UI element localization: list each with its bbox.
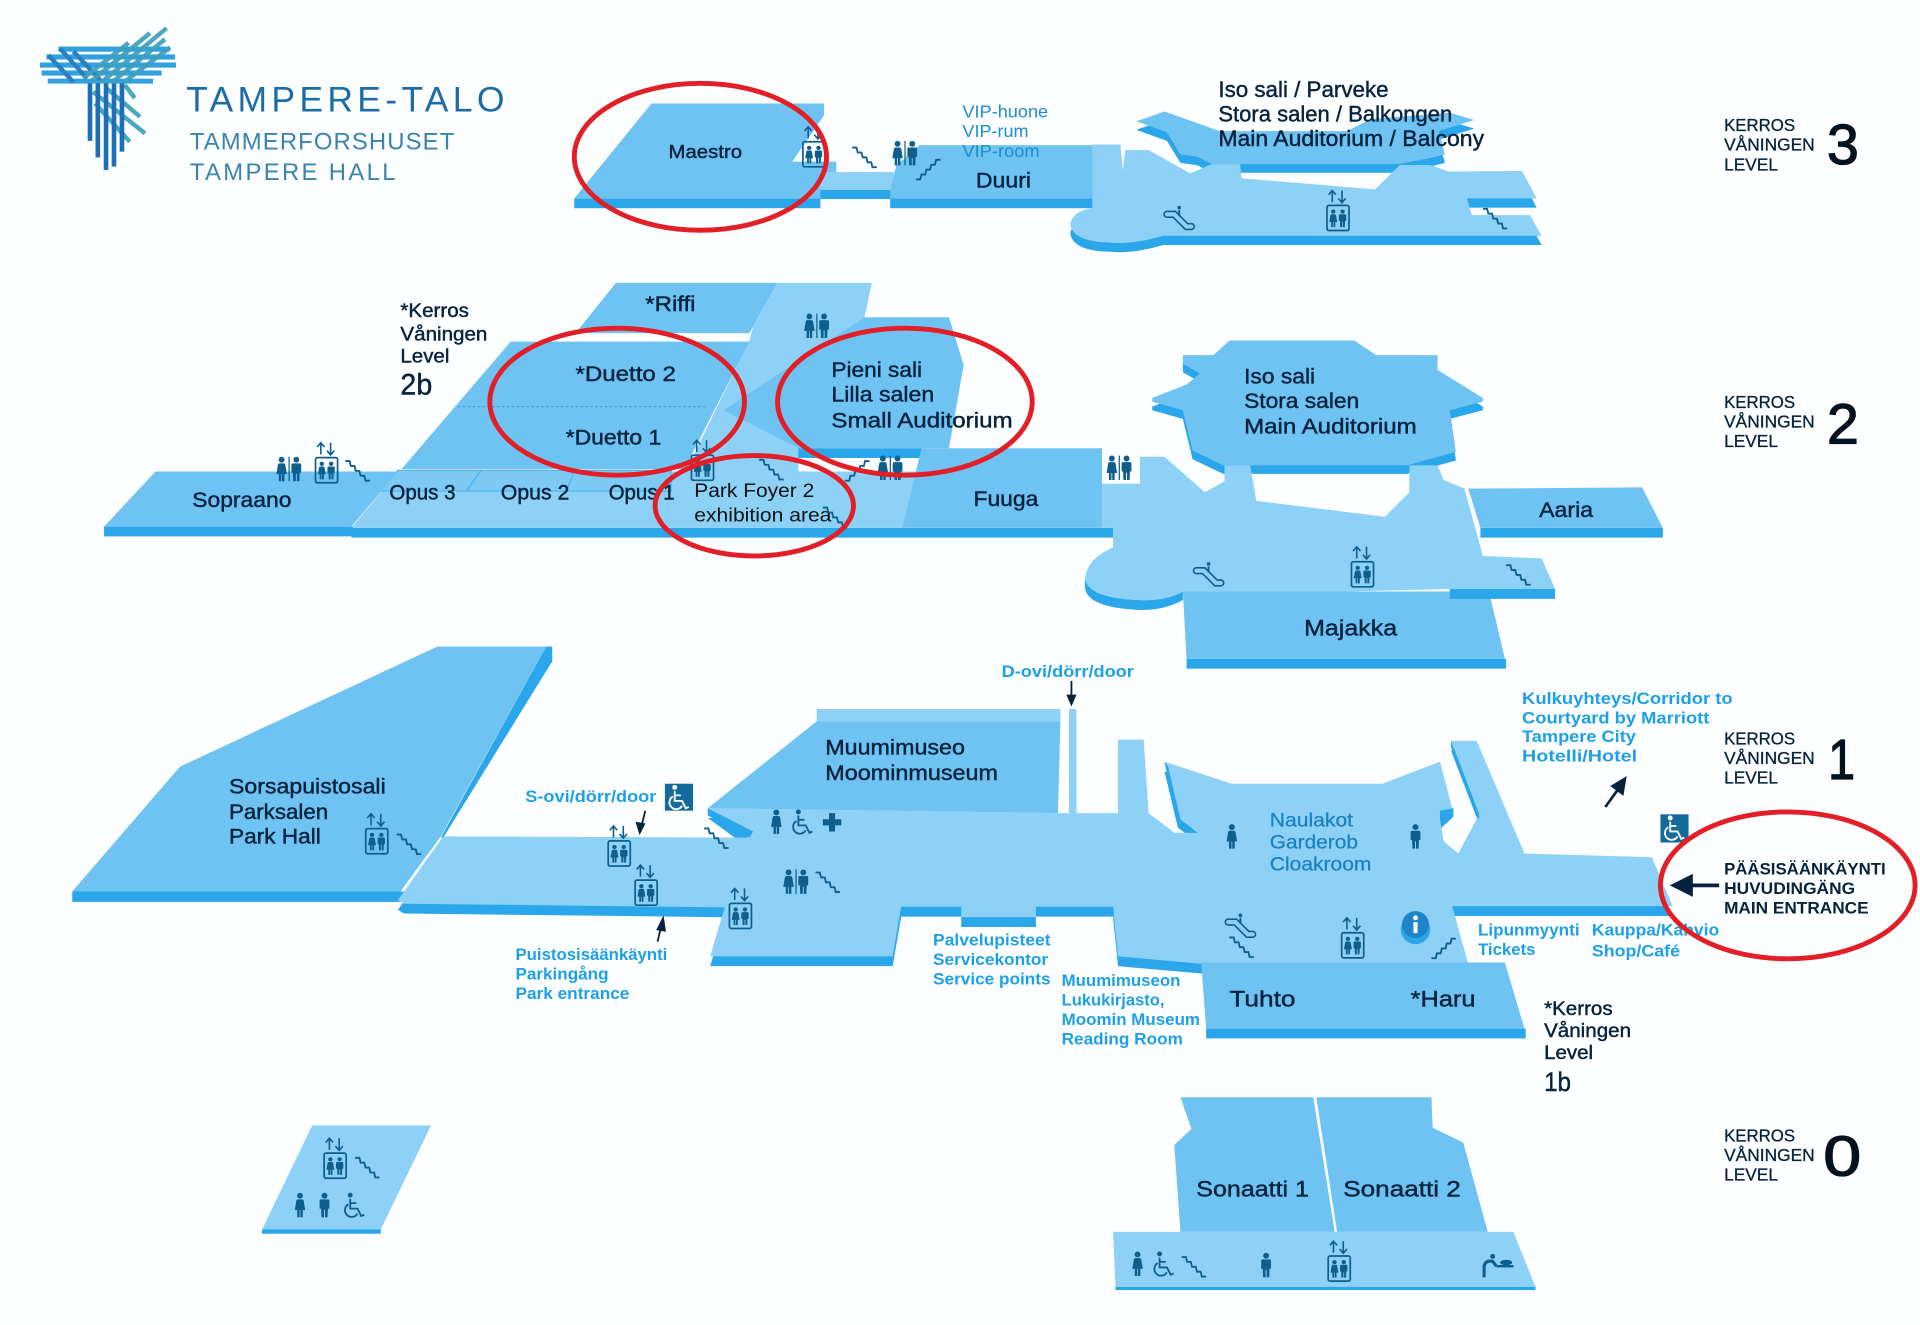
level 2 label: LEVEL [1724, 431, 1778, 451]
icon: stairs level 0 [1182, 1257, 1206, 1277]
tickets label: Lipunmyynti [1478, 921, 1580, 940]
icon: toilets Fuuga [1107, 456, 1131, 480]
Opus labels: Opus 2 [501, 482, 569, 505]
Pieni sali hall: Lilla salen [831, 384, 934, 407]
level 1b label: Våningen [1544, 1021, 1631, 1042]
service points label: Servicekontor [933, 950, 1049, 969]
icon: lift small block [324, 1138, 346, 1178]
VIP room label: VIP-room [962, 141, 1040, 161]
Pieni sali hall [724, 317, 1013, 471]
icon: toilets level 3 [892, 141, 917, 165]
icon: lift corridor [635, 865, 657, 905]
balcony label: Stora salen / Balkongen [1218, 101, 1452, 126]
connecting corridor level 3 [820, 172, 894, 199]
icon: man level 0 [1261, 1253, 1271, 1277]
icon: lift Maestro [803, 127, 825, 167]
icon: first aid [823, 813, 841, 831]
Park Hall [72, 647, 552, 902]
Sonaatti 1 hall: Sonaatti 1 [1196, 1176, 1309, 1201]
Park Foyer label [694, 481, 832, 527]
Sopraano hall: Sopraano [192, 489, 291, 512]
icon: woman small block [295, 1193, 305, 1217]
level 2b label: Våningen [400, 324, 487, 345]
icon: lift Park Hall [366, 814, 388, 854]
floor plan: level 1 [72, 647, 1886, 1049]
red highlight ellipses [490, 83, 1915, 959]
icon: stairs Park Hall [397, 835, 421, 854]
Opus labels: Opus 1 [609, 482, 675, 505]
main entrance label [1724, 859, 1886, 918]
service points label: Service points [933, 970, 1051, 989]
balcony label: Iso sali / Parveke [1218, 77, 1389, 102]
icon: stairs up foyer [845, 461, 869, 481]
Duetto halls: *Duetto 1 [566, 427, 661, 450]
icon: stairs up level 1 [1431, 939, 1456, 958]
level 0 label: LEVEL [1724, 1164, 1778, 1184]
main entrance label: HUVUDINGÄNG [1724, 879, 1855, 898]
logo: Tampere-Talo [40, 28, 504, 186]
cloakroom label: Naulakot [1270, 811, 1354, 832]
Moomin Museum: Moominmuseum [825, 762, 998, 785]
cloakroom label: Cloakroom [1270, 855, 1371, 876]
level 3 label [1724, 113, 1859, 176]
arrow: S door [637, 811, 645, 833]
icon: stairs level 2 right [1506, 565, 1531, 585]
icon: lift level 0 [1328, 1241, 1350, 1281]
Fuuga hall: Fuuga [973, 488, 1039, 511]
level 3 label: LEVEL [1724, 154, 1778, 174]
Iso sali hall: Stora salen [1244, 390, 1359, 413]
Pieni sali hall: Pieni sali [831, 359, 922, 382]
Moomin Museum [708, 709, 1060, 838]
reading room label: Moomin Museum [1062, 1010, 1200, 1029]
Pieni sali hall: Small Auditorium [831, 409, 1013, 432]
arrow: main entrance [1674, 877, 1719, 894]
main entrance label: MAIN ENTRANCE [1724, 899, 1869, 918]
Duuri hall [890, 145, 1098, 208]
Park Foyer label: Park Foyer 2 [694, 481, 814, 502]
Park entrance label: Park entrance [516, 984, 629, 1003]
icon: escalator level 1 [1228, 914, 1253, 934]
logo text: Tampere-Talo: TAMPERE-TALO [186, 79, 504, 119]
level 0 label: KERROS [1724, 1125, 1795, 1145]
icon: information [1401, 911, 1430, 944]
floor plan: level 3 [574, 77, 1542, 252]
icon: woman cloakroom [1227, 824, 1237, 849]
Riffi hall: *Riffi [645, 293, 696, 316]
icon: woman Moomin [771, 809, 782, 834]
level 1 label: 1 [1828, 728, 1855, 791]
service points label [933, 930, 1051, 989]
shop and cafe label: Shop/Café [1592, 941, 1680, 960]
cloakroom label: Garderob [1270, 833, 1358, 854]
logo text: Tammerforshuset: TAMMERFORSHUSET [190, 128, 455, 155]
Duetto halls [402, 342, 749, 469]
level 1b label: Level [1544, 1043, 1593, 1064]
Aaria hall [1468, 487, 1663, 538]
Majakka hall: Majakka [1304, 616, 1398, 641]
corridor to hotel label: Hotelli/Hotel [1522, 747, 1637, 766]
corridor to hotel label [1522, 689, 1733, 766]
arrow: corridor to hotel [1605, 779, 1625, 807]
level 2b label: 2b [400, 368, 432, 401]
icon: wheelchair badge S door [665, 784, 693, 811]
level 3 label: VÅNINGEN [1724, 135, 1815, 155]
level 2 label [1724, 392, 1859, 455]
level 0 label: 0 [1823, 1125, 1861, 1188]
Tuhto and Haru halls [1201, 962, 1526, 1038]
Sonaatti 1 hall [1174, 1097, 1335, 1232]
cloakroom label [1270, 811, 1371, 876]
icon: lift Sopraano [316, 443, 338, 483]
tickets label: Tickets [1478, 940, 1536, 959]
icon: lift level 3 lobby [1327, 190, 1349, 230]
icon: lift lower corridor [729, 888, 751, 928]
icon: stairs foyer [759, 460, 784, 479]
highlight: Park Foyer [655, 456, 853, 556]
icon: toilets Riffi [804, 314, 829, 338]
logo mark: woven T [40, 28, 176, 170]
Iso sali hall: Main Auditorium [1244, 416, 1417, 439]
foyer strip with Opus rooms [351, 470, 1113, 538]
corridor to hotel label: Courtyard by Marriott [1522, 709, 1710, 728]
icon: baby care [1484, 1254, 1513, 1277]
Tuhto and Haru halls: *Haru [1411, 987, 1476, 1012]
balcony label: Main Auditorium / Balcony [1218, 126, 1484, 151]
Moomin Museum: Muumimuseo [825, 736, 965, 759]
Sonaatti 2 hall [1316, 1097, 1488, 1232]
icon: escalator level 2 [1196, 562, 1221, 583]
S door label: S-ovi/dörr/door [525, 787, 657, 806]
Opus labels: Opus 3 [389, 482, 456, 505]
VIP room label: VIP-rum [962, 121, 1029, 141]
icon: wheelchair badge main entrance [1660, 814, 1689, 842]
icon: stairs level 1 [816, 872, 840, 892]
icon: lift Duetto [691, 440, 714, 480]
icon: woman level 0 [1132, 1251, 1143, 1276]
icon: wheelchair Moomin [793, 809, 812, 834]
reading room label [1062, 971, 1200, 1049]
level 3 label: KERROS [1724, 115, 1795, 135]
highlight: Pieni sali [778, 328, 1032, 475]
icon: lift S door [608, 826, 630, 866]
logo text: Tampere Hall: TAMPERE HALL [190, 159, 396, 186]
level 1 label [1724, 728, 1855, 791]
icon: toilets Pieni sali [878, 456, 902, 480]
level 1b label: *Kerros [1544, 999, 1613, 1020]
Duetto halls: *Duetto 2 [576, 363, 676, 386]
Park Foyer label: exhibition area [694, 506, 832, 527]
icon: toilets level 1 [783, 869, 808, 894]
icon: wheelchair small block [345, 1193, 364, 1217]
icon: stairs under escalator [1229, 937, 1254, 957]
tickets label [1478, 921, 1580, 959]
icon: lift level 2 lobby [1351, 547, 1374, 587]
level 1 label: VÅNINGEN [1724, 748, 1815, 768]
highlight: Maestro [574, 83, 827, 230]
Opus labels [389, 482, 675, 505]
icon: escalator level 3 [1167, 206, 1191, 227]
corridor to hotel label: Kulkuyhteys/Corridor to [1522, 689, 1733, 708]
balcony label [1218, 77, 1484, 151]
VIP room label: VIP-huone [962, 102, 1048, 122]
highlight: main entrance [1660, 812, 1915, 959]
balcony [1136, 111, 1474, 173]
arrow: park entrance [658, 918, 665, 942]
lobby and corridors level 1 [398, 709, 1673, 974]
lobby level 2 [1085, 457, 1555, 610]
small level 0 block [262, 1125, 431, 1234]
arrow: D door [1068, 681, 1075, 704]
lower foyer band [1113, 1232, 1536, 1290]
Park Hall: Parksalen [229, 801, 328, 824]
level 2 label: KERROS [1724, 392, 1795, 412]
level 2b label [400, 301, 487, 401]
Sonaatti 2 hall: Sonaatti 2 [1343, 1176, 1461, 1201]
Park entrance label: Parkingång [516, 965, 609, 984]
Riffi hall [576, 283, 778, 333]
Park Hall: Park Hall [229, 826, 321, 849]
level 1 label: LEVEL [1724, 768, 1778, 788]
level 2 label: VÅNINGEN [1724, 411, 1815, 431]
level 0 label [1724, 1125, 1861, 1188]
icon: stairs Moomin wedge [704, 828, 729, 848]
Iso sali hall: Iso sali [1244, 365, 1315, 388]
reading room label: Lukukirjasto, [1062, 990, 1164, 1009]
main entrance label: PÄÄSISÄÄNKÄYNTI [1724, 859, 1886, 878]
Duuri hall: Duuri [976, 169, 1031, 192]
level 1b label: 1b [1544, 1067, 1571, 1097]
shop and cafe label [1592, 921, 1719, 960]
D door label: D-ovi/dörr/door [1002, 662, 1134, 681]
level 2 label: 2 [1827, 392, 1859, 455]
Park entrance label: Puistosisäänkäynti [516, 945, 667, 964]
Maestro hall: Maestro [669, 141, 742, 162]
icon: man small block [320, 1193, 329, 1217]
Park Hall: Sorsapuistosali [229, 776, 386, 799]
level 1 label: KERROS [1724, 729, 1795, 749]
icon: wheelchair level 0 [1154, 1251, 1174, 1276]
icon: stairs Maestro corridor [852, 148, 877, 167]
Sopraano hall [104, 471, 398, 536]
level 2b label: Level [400, 346, 449, 367]
floor plan: level 0 [262, 1097, 1536, 1290]
reading room label: Reading Room [1062, 1030, 1183, 1049]
highlight: Duetto [490, 328, 744, 475]
icon: stairs Sopraano [345, 461, 370, 481]
icon: toilets Sopraano [276, 457, 301, 481]
level 2b label: *Kerros [400, 301, 469, 322]
icon: stairs small block [355, 1158, 380, 1177]
floor plan: level 2 [104, 283, 1663, 669]
Tuhto and Haru halls: Tuhto [1229, 987, 1296, 1012]
reading room label: Muumimuseon [1062, 971, 1180, 990]
Maestro hall [574, 104, 836, 208]
icon: stairs foyer lower [823, 508, 847, 527]
icon: lift level 1 lobby [1342, 918, 1364, 958]
Majakka hall [1183, 591, 1506, 669]
Park entrance label [516, 945, 667, 1003]
level 3 label: 3 [1827, 113, 1859, 176]
level 1b label [1544, 999, 1631, 1097]
Iso sali hall [1152, 340, 1483, 474]
icon: stairs up Duuri [916, 160, 940, 179]
Fuuga hall [902, 448, 1102, 528]
shop and cafe label: Kauppa/Kahvio [1592, 921, 1719, 940]
icon: man cloakroom [1411, 824, 1420, 849]
Aaria hall: Aaria [1539, 499, 1594, 522]
VIP room label [962, 102, 1048, 161]
light stair hall between Duetto and Pieni sali [686, 283, 872, 471]
service points label: Palvelupisteet [933, 930, 1051, 949]
level 0 label: VÅNINGEN [1724, 1145, 1815, 1165]
lobby level 3 [1070, 145, 1542, 252]
corridor to hotel label: Tampere City [1522, 727, 1637, 746]
icon: stairs level 3 right [1483, 209, 1507, 228]
